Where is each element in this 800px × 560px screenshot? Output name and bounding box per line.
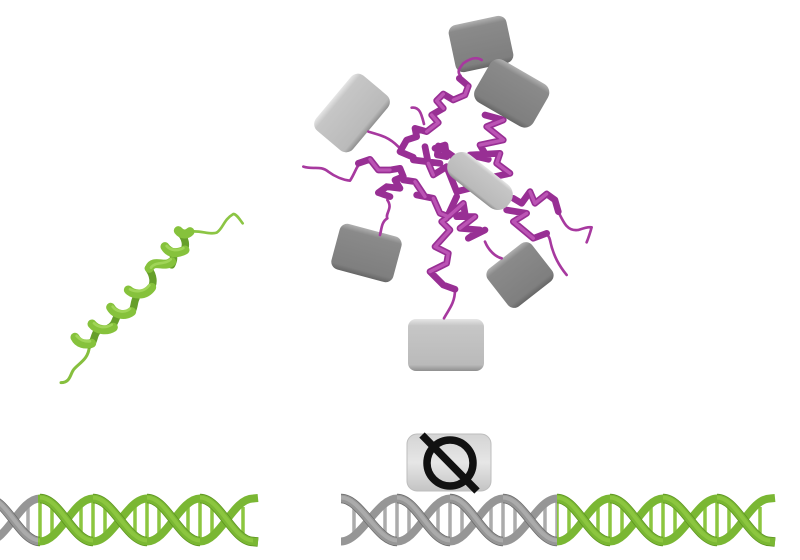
domain: lower right (483, 239, 557, 311)
domain: lower left (330, 222, 403, 284)
grey box (407, 434, 491, 491)
grey domains behind the helices (310, 14, 557, 371)
helix ribbons highlight (370, 86, 547, 272)
icon: null symbol (422, 435, 477, 491)
descending strand (0, 498, 258, 542)
magenta helices (303, 58, 592, 318)
thin linkers (303, 58, 592, 318)
helix ribbons dark (358, 78, 558, 289)
descending strand edge (341, 498, 775, 542)
domain: upper left (310, 70, 394, 156)
domain: upper right (470, 55, 553, 131)
purple protein complex (303, 14, 592, 371)
ascending strand (0, 498, 258, 542)
descending strand edge (0, 498, 258, 542)
inactive domain with null symbol (407, 434, 491, 491)
descending strand (341, 498, 775, 542)
domain: bottom (408, 319, 484, 371)
DNA right: grey to green (341, 498, 775, 542)
base pair rungs (28, 500, 243, 540)
domain: central capsule (442, 147, 518, 215)
ascending strand (341, 498, 775, 542)
DNA left: grey to green (0, 498, 258, 542)
green peptide helix (61, 214, 243, 383)
base pair rungs (354, 500, 760, 540)
strand highlight (341, 498, 770, 540)
domain: top (447, 14, 515, 74)
strand highlight (0, 498, 253, 540)
